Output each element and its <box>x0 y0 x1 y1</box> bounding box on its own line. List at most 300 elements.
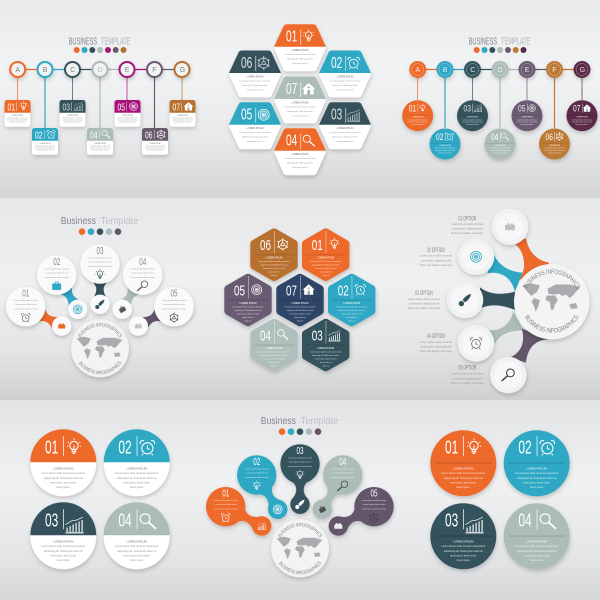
hexagon 07: Lorem ipsum dolor sit amet consectetur <box>284 106 316 108</box>
option disc 04 <box>458 325 494 362</box>
node D: D <box>498 67 503 74</box>
hexagon 05: adipiscing elit. Nulla ipsum dolor <box>242 136 268 139</box>
option disc 05 <box>490 357 527 393</box>
hexagon 05: LOREM IPSUM <box>240 302 256 305</box>
globe disc: BUSINESS INFOGRAPHICS <box>278 522 322 538</box>
circle 01: amet ipsum lorem dolor <box>50 481 77 484</box>
hexagon 01: LOREM IPSUM <box>317 256 334 259</box>
round card 02 <box>430 128 460 160</box>
hexagon 07: ipsum dolor sit <box>294 316 306 319</box>
card 03 <box>60 100 86 127</box>
card 06: Lorem ipsum dolor sit amet <box>147 149 164 152</box>
panel: coloured hexagon cluster <box>224 228 375 371</box>
card 02: LOREM IPSUM <box>39 143 51 145</box>
hexagon 07 <box>276 274 324 326</box>
option texts: Lorem ipsum dolor sit amet <box>420 254 452 258</box>
circle 03 <box>30 502 96 569</box>
globe disc <box>70 320 132 381</box>
circle 03: amet ipsum lorem dolor <box>50 554 77 557</box>
card 02: Lorem ipsum dolor sit amet cons <box>35 147 55 150</box>
circle 04: amet ipsum lorem dolor <box>124 554 150 557</box>
hexagon 02: amet ipsum lorem sit <box>337 88 354 92</box>
hexagon 02: 02 <box>338 282 349 299</box>
round card 03: Lorem ipsum dolor sit <box>466 123 480 126</box>
card 05: LOREM IPSUM <box>122 115 134 117</box>
circle 04: lorem ipsum <box>130 559 144 562</box>
hexagon 02 <box>319 50 371 98</box>
option 02: Lorem ipsum dolor sit am <box>45 272 68 274</box>
option texts: consectetur adipiscing elit <box>452 376 483 380</box>
round card 04: Lorem ipsum dolor sit <box>493 151 507 154</box>
world map disc <box>513 264 592 343</box>
circle 01: lorem ipsum <box>56 486 70 489</box>
round card 05: Lorem ipsum dolor sit amet cons <box>517 118 537 121</box>
circle 04: Lorem ipsum dolor sit amet consectetur <box>515 545 559 548</box>
metaball 01: Lorem ipsum dolor sit amet <box>214 499 238 502</box>
globe disc: BUSINESS INFOGRAPHICS <box>78 361 122 374</box>
colour dots <box>74 47 126 53</box>
hexagon 04: adipiscing elit. Nulla dolor sit amet <box>260 354 288 357</box>
node E <box>120 62 134 77</box>
circle 04: LOREM IPSUM <box>127 539 147 543</box>
hexagon 01: Lorem ipsum dolor sit amet consectetur <box>310 260 342 263</box>
hexagon 06 <box>250 228 298 281</box>
circle 04 <box>104 502 170 569</box>
hexagon 06: Lorem ipsum dolor sit amet consectetur <box>239 80 271 82</box>
hexagon 03: Lorem ipsum dolor sit amet consectetur <box>329 131 361 134</box>
card 03: Lorem ipsum dolor sit amet cons <box>62 116 83 120</box>
hexagon 03: 03 <box>331 107 342 124</box>
round card 07: 07 <box>573 104 580 115</box>
option 03: Lorem ipsum dolor sit am <box>89 260 112 264</box>
hexagon 07: dolor sit <box>297 320 304 322</box>
hexagon 02: LOREM IPSUM <box>343 302 360 305</box>
card 01 <box>4 100 30 127</box>
option 01: Lorem ipsum dolor sit am <box>14 303 37 306</box>
hexagon 05: adipiscing elit. Nulla dolor sit amet <box>234 309 262 312</box>
round card 01: Lorem ipsum dolor sit <box>411 123 425 126</box>
option 02 <box>37 255 76 295</box>
circle 02: LOREM IPSUM <box>527 466 547 470</box>
metaball 02: 02 <box>253 457 260 468</box>
globe disc: BUSINESS INFOGRAPHICS <box>78 322 122 338</box>
title: Business <box>261 415 296 427</box>
card 02 <box>32 128 58 155</box>
hexagon 01: dolor sit <box>323 274 329 277</box>
hexagon 01: Lorem ipsum dolor sit amet <box>315 267 337 270</box>
option 03: Lorem ipsum dolor sit amet <box>88 256 113 260</box>
round card 01: LOREM IPSUM <box>412 117 424 119</box>
circle 03: adipiscing elit. Nulla ipsum dolor sit <box>444 550 483 553</box>
hexagon 01: ipsum dolor sit <box>320 271 332 274</box>
node B: B <box>443 67 448 74</box>
hexagon 01: 01 <box>286 29 297 46</box>
small icon disc 3 <box>90 295 110 314</box>
circle 01: 01 <box>445 437 458 457</box>
card 06: LOREM IPSUM <box>149 143 161 145</box>
card 05: Lorem ipsum dolor sit amet cons <box>117 119 138 122</box>
node B <box>436 61 454 78</box>
hexagon 06: ipsum dolor sit <box>268 271 280 274</box>
card 05: Lorem ipsum dolor sit amet <box>119 121 136 124</box>
metaball 05: Lorem ipsum dolor sit am <box>363 503 386 506</box>
hexagon 04: adipiscing elit. Nulla ipsum dolor <box>287 162 313 165</box>
circle 04 <box>504 503 570 569</box>
metaball 04 <box>311 455 362 519</box>
card 02: Lorem ipsum dolor sit amet <box>37 149 54 152</box>
title: TEMPLATE <box>501 36 531 48</box>
hexagon 01 <box>274 24 326 71</box>
card 02: 02 <box>35 131 42 142</box>
round card 05: Lorem ipsum dolor sit <box>520 123 534 126</box>
colour dots <box>474 47 526 53</box>
hexagon 05: 05 <box>234 282 245 299</box>
round card 04: 04 <box>491 132 498 143</box>
round card 03: Lorem ipsum dolor sit amet cons <box>462 118 483 121</box>
metaball 02: Lorem ipsum dolor sit am <box>245 472 268 474</box>
round card 03 <box>457 100 488 131</box>
round card 04: Lorem ipsum dolor sit amet cons <box>490 149 510 152</box>
panel: coloured metaball diagram <box>204 415 396 581</box>
option texts: Lorem ipsum dolor sit amet <box>451 222 484 226</box>
globe disc <box>270 520 332 581</box>
hexagon 05: ipsum dolor sit <box>242 316 254 319</box>
hexagon 01: Lorem ipsum dolor sit amet consectetur <box>284 53 316 56</box>
hexagon 06: amet ipsum lorem sit <box>247 88 264 92</box>
hexagon 06: 06 <box>260 237 271 254</box>
round card 06: LOREM IPSUM <box>549 145 561 147</box>
card 03: Lorem ipsum dolor sit amet <box>64 121 81 124</box>
world map disc: BUSINESS INFOGRAPHICS <box>524 314 578 333</box>
circle 02: amet ipsum lorem dolor <box>524 481 550 484</box>
metaball 03: Lorem ipsum dolor sit amet <box>288 456 313 460</box>
circle 01: LOREM IPSUM <box>453 466 474 470</box>
hexagon 02: 02 <box>331 55 342 72</box>
circle 01: amet ipsum lorem dolor <box>450 481 477 484</box>
small icon disc 5 <box>129 316 148 336</box>
hexagon 03: 03 <box>312 327 323 344</box>
metaball 04: Lorem ipsum dolor sit amet <box>331 476 355 479</box>
option texts <box>408 216 484 385</box>
node B <box>38 62 52 77</box>
node C: C <box>470 67 475 74</box>
option texts: Nunc nec sapien sed turpis <box>420 263 453 267</box>
hexagon 02: ipsum dolor sit <box>346 316 358 319</box>
hexagon 04: 04 <box>286 133 297 150</box>
round card 06: Lorem ipsum dolor sit amet cons <box>544 147 565 150</box>
circle 04: amet ipsum lorem dolor <box>524 554 550 557</box>
card 06 <box>142 128 168 155</box>
timeline connectors <box>18 70 182 128</box>
hexagon 01: amet ipsum lorem sit <box>292 62 309 65</box>
option texts: 02 OPTION <box>427 248 445 254</box>
panel: white and colour circles <box>30 429 170 569</box>
hexagon 03: adipiscing elit. Nulla ipsum dolor <box>332 136 358 139</box>
round card 01 <box>402 100 433 131</box>
hexagon 06: dolor sit <box>271 274 278 277</box>
round card 07: Lorem ipsum dolor sit amet cons <box>572 118 592 121</box>
option 05: Lorem ipsum dolor sit am <box>163 303 186 306</box>
hexagon 04: LOREM IPSUM <box>292 153 308 156</box>
small icon disc 2 <box>68 300 87 319</box>
node F: F <box>152 67 156 74</box>
card 01: Lorem ipsum dolor sit amet cons <box>7 116 28 120</box>
option 05: Lorem ipsum dolor sit amet <box>162 299 187 302</box>
colour dots <box>279 428 321 435</box>
circle 03: Lorem ipsum dolor sit amet consectetur <box>41 545 85 548</box>
circle 04: adipiscing elit. Nulla ipsum dolor sit <box>117 550 156 553</box>
option disc 02 <box>458 238 494 275</box>
hexagon 06 <box>229 50 281 98</box>
card 03: LOREM IPSUM <box>67 115 79 117</box>
metaball 01: Lorem ipsum dolor sit amet <box>214 508 238 511</box>
option 03: 03 <box>96 246 104 257</box>
option texts: Lorem ipsum dolor sit amet <box>408 297 440 301</box>
circle 04: 04 <box>118 510 132 530</box>
card 01: 01 <box>8 103 15 114</box>
title: BUSINESS <box>469 36 497 48</box>
hexagon 01: 01 <box>312 237 323 254</box>
node A <box>409 61 426 78</box>
circle 01: Lorem ipsum dolor sit amet consectetur <box>441 472 485 475</box>
hexagon 05: 05 <box>241 107 252 124</box>
card 05: Lorem ipsum dolor sit amet cons <box>117 116 138 120</box>
hexagon 02 <box>328 274 375 326</box>
hexagon 06: 06 <box>241 55 252 72</box>
round card 03: 03 <box>464 104 471 115</box>
option 04: Lorem ipsum dolor sit am <box>131 272 154 274</box>
node C <box>464 61 481 78</box>
circle 02 <box>104 429 170 496</box>
option 01: 01 <box>22 289 29 300</box>
round card 01: Lorem ipsum dolor sit amet cons <box>408 121 428 124</box>
round card 02: LOREM IPSUM <box>439 145 451 147</box>
round card 04: Lorem ipsum dolor sit amet cons <box>490 147 510 150</box>
circle 01 <box>30 429 96 496</box>
round card 03: LOREM IPSUM <box>467 117 479 119</box>
hexagon 03: Lorem ipsum dolor sit amet consectetur <box>310 350 342 354</box>
card 04: LOREM IPSUM <box>94 143 106 145</box>
metaball 03: Lorem ipsum dolor sit am <box>289 460 312 464</box>
option 05 <box>154 287 194 326</box>
node E: E <box>125 67 130 74</box>
card 06: Lorem ipsum dolor sit amet cons <box>145 147 165 150</box>
hexagon 05: Lorem ipsum dolor sit amet consectetur <box>239 131 271 134</box>
circle 04: adipiscing elit. Nulla ipsum dolor sit <box>517 550 556 553</box>
node D <box>92 62 108 77</box>
card 01: Lorem ipsum dolor sit amet cons <box>7 119 28 122</box>
hexagon 01: adipiscing elit. Nulla ipsum dolor <box>287 58 313 61</box>
option texts: Nunc nec sapien sed turpis <box>420 349 453 353</box>
title <box>61 215 138 227</box>
hexagon 05 <box>229 102 281 149</box>
colour dots <box>79 228 121 235</box>
circle 03: LOREM IPSUM <box>53 539 74 543</box>
option texts: consectetur adipiscing elit <box>409 301 439 305</box>
option texts: 05 OPTION <box>458 366 476 372</box>
hexagon 04: Lorem ipsum dolor sit amet consectetur <box>284 157 316 160</box>
option 04: Lorem ipsum dolor sit amet <box>131 276 155 279</box>
round card 01: Lorem ipsum dolor sit amet cons <box>408 118 428 121</box>
hexagon 07: Lorem ipsum dolor sit amet consectetur <box>284 306 316 308</box>
title: Business <box>61 215 96 227</box>
option texts: consectetur adipiscing elit <box>421 258 451 262</box>
option texts: consectetur adipiscing elit <box>452 226 483 230</box>
hexagon 03: dolor sit <box>323 364 329 368</box>
metaball 05: 05 <box>370 489 378 500</box>
circle 03: LOREM IPSUM <box>453 539 474 543</box>
option texts: Nunc nec sapien sed turpis <box>451 231 484 235</box>
metaball 04: Lorem ipsum dolor sit amet <box>331 468 355 470</box>
hexagon 04: 04 <box>260 327 271 344</box>
card 07: Lorem ipsum dolor sit amet <box>174 121 191 124</box>
circle 03: adipiscing elit. Nulla ipsum dolor sit <box>44 550 83 553</box>
circle 01: lorem ipsum <box>456 486 470 489</box>
panel: options with world map disc <box>408 208 592 397</box>
node E: E <box>525 67 530 74</box>
hexagon 02: LOREM IPSUM <box>337 76 353 78</box>
hexagon 05: amet ipsum lorem sit <box>247 140 264 143</box>
hexagon 05: Lorem ipsum dolor sit amet consectetur <box>232 306 264 308</box>
node E <box>518 61 536 78</box>
hexagon 07: 07 <box>286 282 297 299</box>
hexagon 03 <box>302 319 349 371</box>
panel: solid colour circles <box>430 430 570 569</box>
node D <box>492 61 508 78</box>
circle 01 <box>430 430 496 496</box>
round card 04 <box>484 128 516 160</box>
round card 06: Lorem ipsum dolor sit <box>548 151 562 154</box>
circle 02 <box>504 430 570 496</box>
node F <box>147 62 162 77</box>
metaball 03 <box>280 444 320 514</box>
round card 05: 05 <box>518 104 525 115</box>
hexagon 05 <box>224 274 272 326</box>
option 05: Lorem ipsum dolor sit amet <box>162 308 187 311</box>
timeline connectors <box>418 70 582 128</box>
option disc 01 <box>492 208 528 245</box>
hexagon 06: LOREM IPSUM <box>266 256 282 259</box>
circle 02: amet ipsum lorem dolor <box>124 481 150 484</box>
globe disc: BUSINESS INFOGRAPHICS <box>278 561 322 574</box>
option 04: 04 <box>139 257 146 268</box>
metaball 03: Lorem ipsum dolor sit amet <box>288 465 313 468</box>
circle 02: Lorem ipsum dolor sit amet consectetur <box>515 472 559 475</box>
hexagon 02: Lorem ipsum dolor sit amet consectetur <box>336 306 368 308</box>
node A: A <box>415 67 420 74</box>
hexagon 01 <box>302 228 349 281</box>
round card 02: Lorem ipsum dolor sit amet cons <box>435 149 455 152</box>
round card 07: Lorem ipsum dolor sit amet cons <box>572 121 592 124</box>
card 05 <box>114 100 140 127</box>
circle 04: 04 <box>518 510 532 530</box>
circle 02: lorem ipsum <box>130 486 144 489</box>
circle 02: lorem ipsum <box>530 486 544 489</box>
card 04: Lorem ipsum dolor sit amet cons <box>90 147 110 150</box>
round card 02: Lorem ipsum dolor sit <box>438 151 452 154</box>
hexagon 02: adipiscing elit. Nulla dolor sit amet <box>338 309 366 312</box>
hexagon 05: dolor sit <box>245 320 252 322</box>
hexagon 07 <box>274 76 326 124</box>
curved connectors <box>480 238 550 363</box>
card 04: Lorem ipsum dolor sit amet cons <box>90 144 110 148</box>
option 04: Lorem ipsum dolor sit amet <box>131 268 155 270</box>
circle 04: lorem ipsum <box>530 559 544 562</box>
small icon disc 4 <box>113 300 132 319</box>
option texts: Lorem ipsum dolor sit amet <box>451 372 484 376</box>
round card 07 <box>566 100 598 131</box>
option texts: consectetur adipiscing elit <box>421 345 451 349</box>
option disc 03 <box>447 282 483 318</box>
hexagon 04: amet ipsum lorem sit <box>292 166 309 169</box>
circle 02: adipiscing elit. Nulla ipsum dolor sit <box>517 477 556 480</box>
hexagon 03: Lorem ipsum dolor sit amet <box>315 358 337 360</box>
node G <box>174 62 190 77</box>
round card 02: 02 <box>436 132 443 143</box>
round card 07: Lorem ipsum dolor sit <box>575 123 589 126</box>
title: Template <box>101 215 138 227</box>
title: Template <box>301 415 338 427</box>
card 05: 05 <box>118 103 125 114</box>
option 02: Lorem ipsum dolor sit amet <box>45 276 69 279</box>
hexagon 02: dolor sit <box>349 320 355 322</box>
panel: white metaball diagram <box>4 215 196 381</box>
round card 01: 01 <box>409 104 416 115</box>
circle 03: amet ipsum lorem dolor <box>450 554 477 557</box>
option texts: Nunc nec sapien sed turpis <box>408 306 441 310</box>
hexagon 04: LOREM IPSUM <box>266 347 282 350</box>
metaball 05: Lorem ipsum dolor sit amet <box>362 508 387 511</box>
circle 04: LOREM IPSUM <box>527 539 547 543</box>
card 06: Lorem ipsum dolor sit amet cons <box>145 144 165 148</box>
panel: white hexagon cluster <box>229 24 371 175</box>
card 02: Lorem ipsum dolor sit amet cons <box>35 144 55 148</box>
hexagon 04: Lorem ipsum dolor sit amet consectetur <box>258 350 290 354</box>
node C: C <box>70 67 75 74</box>
option texts: 01 OPTION <box>458 216 476 222</box>
title: BUSINESS <box>69 36 97 48</box>
metaball 03: 03 <box>296 446 304 457</box>
option 04 <box>123 255 162 295</box>
circle 03 <box>430 503 496 569</box>
small icon disc 1 <box>52 316 71 336</box>
circle 01: Lorem ipsum dolor sit amet consectetur <box>41 472 85 475</box>
circle 01: adipiscing elit. Nulla ipsum dolor sit <box>44 477 83 480</box>
card 07: LOREM IPSUM <box>177 115 189 117</box>
hexagon 03: LOREM IPSUM <box>317 347 334 350</box>
round card 02: Lorem ipsum dolor sit amet cons <box>435 147 455 150</box>
option texts: Lorem ipsum dolor sit amet <box>420 340 452 344</box>
node F: F <box>552 67 556 74</box>
circle 04: Lorem ipsum dolor sit amet consectetur <box>115 545 159 548</box>
metaball 05: Lorem ipsum dolor sit amet <box>362 499 387 502</box>
circle 01: adipiscing elit. Nulla ipsum dolor sit <box>444 477 483 480</box>
metaball 02 <box>237 455 288 519</box>
card 07: Lorem ipsum dolor sit amet cons <box>172 119 193 122</box>
option texts: 04 OPTION <box>427 334 445 340</box>
card 07: 07 <box>172 103 180 114</box>
card 04: 04 <box>90 131 98 142</box>
circle 01: 01 <box>45 437 58 457</box>
node B: B <box>43 67 48 74</box>
card 01: LOREM IPSUM <box>12 115 24 117</box>
round card 06: 06 <box>546 132 553 143</box>
option 03: Lorem ipsum dolor sit amet <box>88 265 113 268</box>
option texts: Nunc nec sapien sed turpis <box>451 381 484 385</box>
metaball 02: Lorem ipsum dolor sit amet <box>245 468 269 470</box>
option 02: 02 <box>53 257 60 268</box>
round card 07: LOREM IPSUM <box>576 117 588 119</box>
